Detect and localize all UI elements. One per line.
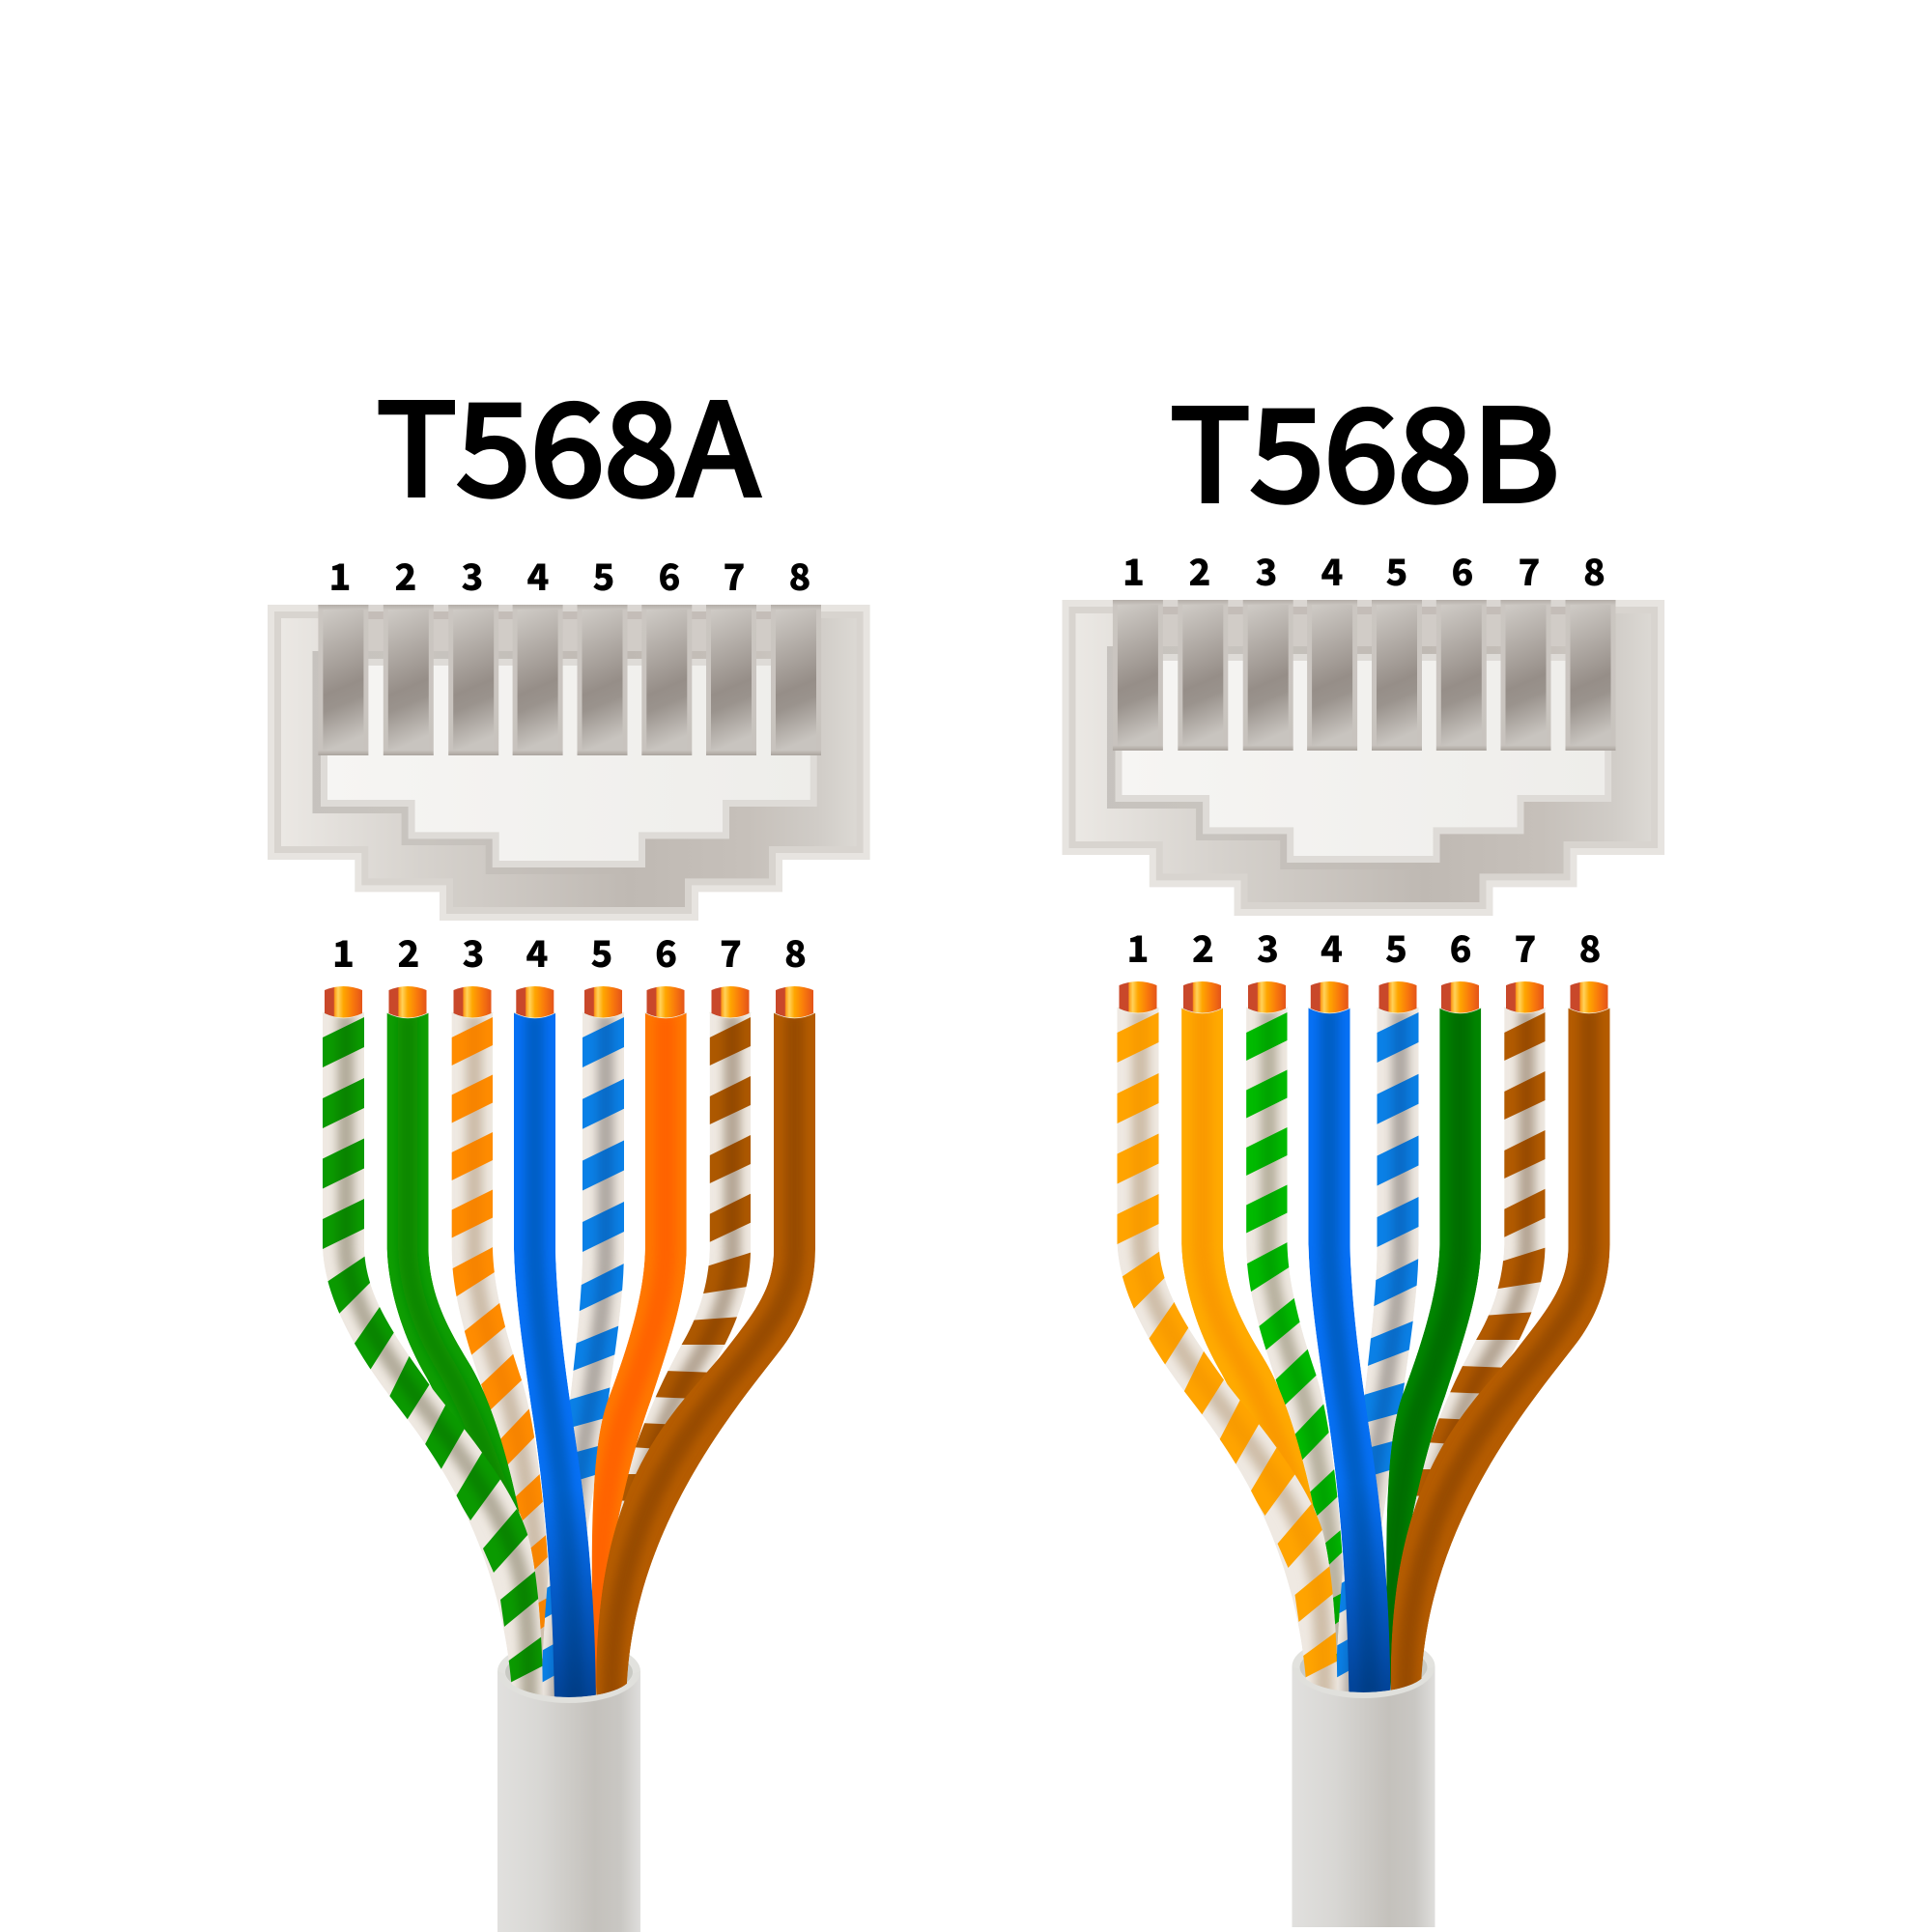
wire 4: blue xyxy=(1308,1008,1391,1692)
copper conductor tips xyxy=(1117,981,1609,1012)
wire numbers: 5 xyxy=(590,924,613,978)
connector pin numbers xyxy=(1122,543,1605,596)
wire numbers: 6 xyxy=(655,924,677,978)
wire numbers: 5 xyxy=(1385,920,1407,973)
connector pin numbers: 7 xyxy=(1518,543,1541,596)
cable jacket rim, back xyxy=(1293,1635,1435,1697)
connector pin numbers: 2 xyxy=(394,548,417,601)
connector pin numbers: 8 xyxy=(788,548,811,601)
wire 8: brown xyxy=(1391,1008,1609,1700)
wire 3: white-orange xyxy=(452,1013,549,1667)
wire numbers: 3 xyxy=(462,924,485,978)
wire 6: orange xyxy=(592,1012,687,1705)
copper conductor tips xyxy=(323,986,815,1018)
RJ45 connector with gold pins, T568B xyxy=(1063,600,1664,916)
wire 8: brown xyxy=(596,1012,815,1705)
wire numbers xyxy=(1126,920,1602,973)
wire numbers xyxy=(332,924,807,978)
wire numbers: 2 xyxy=(397,924,420,978)
connector pin numbers: 5 xyxy=(592,548,615,601)
connector pin numbers: 4 xyxy=(526,548,550,601)
wire numbers: 1 xyxy=(332,924,355,978)
wire 7: white-brown xyxy=(1412,1009,1546,1515)
wire 5: white-blue xyxy=(542,1013,624,1696)
wire 1: white-amber xyxy=(1117,1008,1341,1700)
title: T568B: T568B xyxy=(1171,354,1559,537)
wire numbers: 7 xyxy=(1514,920,1537,973)
RJ45 connector with gold pins, T568A xyxy=(268,605,870,921)
connector pin numbers: 1 xyxy=(1122,543,1145,596)
wire 2: green xyxy=(386,1012,520,1515)
wire numbers: 8 xyxy=(1578,920,1602,973)
cable jacket rim, back xyxy=(497,1640,640,1702)
wire numbers: 8 xyxy=(784,924,807,978)
connector pin numbers: 3 xyxy=(461,548,484,601)
wire 3: white-green xyxy=(1246,1009,1343,1663)
wire numbers: 1 xyxy=(1126,920,1150,973)
connector pin numbers: 6 xyxy=(658,548,681,601)
panel: T568B standard xyxy=(1063,354,1664,1927)
panel: T568A standard xyxy=(268,348,870,1932)
connector pin numbers: 8 xyxy=(1583,543,1605,596)
wire 5: white-blue xyxy=(1337,1009,1418,1692)
wire 1: white-green xyxy=(323,1012,546,1705)
connector pin numbers: 1 xyxy=(328,548,352,601)
connector pin numbers: 7 xyxy=(723,548,746,601)
wire numbers: 4 xyxy=(526,924,549,978)
connector pin numbers: 2 xyxy=(1188,543,1211,596)
cable jacket xyxy=(497,1671,640,1932)
wire numbers: 4 xyxy=(1321,920,1343,973)
wire 6: dark green xyxy=(1386,1008,1481,1700)
connector pin numbers: 6 xyxy=(1451,543,1474,596)
wire numbers: 6 xyxy=(1450,920,1472,973)
wire numbers: 2 xyxy=(1192,920,1214,973)
wire 7: white-brown xyxy=(618,1013,751,1519)
wire numbers: 7 xyxy=(720,924,742,978)
connector pin numbers: 4 xyxy=(1321,543,1344,596)
cable jacket xyxy=(1293,1666,1435,1927)
connector pin numbers: 3 xyxy=(1255,543,1278,596)
wire 4: blue xyxy=(514,1012,596,1697)
title: T568A: T568A xyxy=(377,348,759,531)
wire numbers: 3 xyxy=(1257,920,1279,973)
wire 2: amber xyxy=(1181,1008,1314,1510)
connector pin numbers: 5 xyxy=(1385,543,1408,596)
connector pin numbers xyxy=(328,548,811,601)
